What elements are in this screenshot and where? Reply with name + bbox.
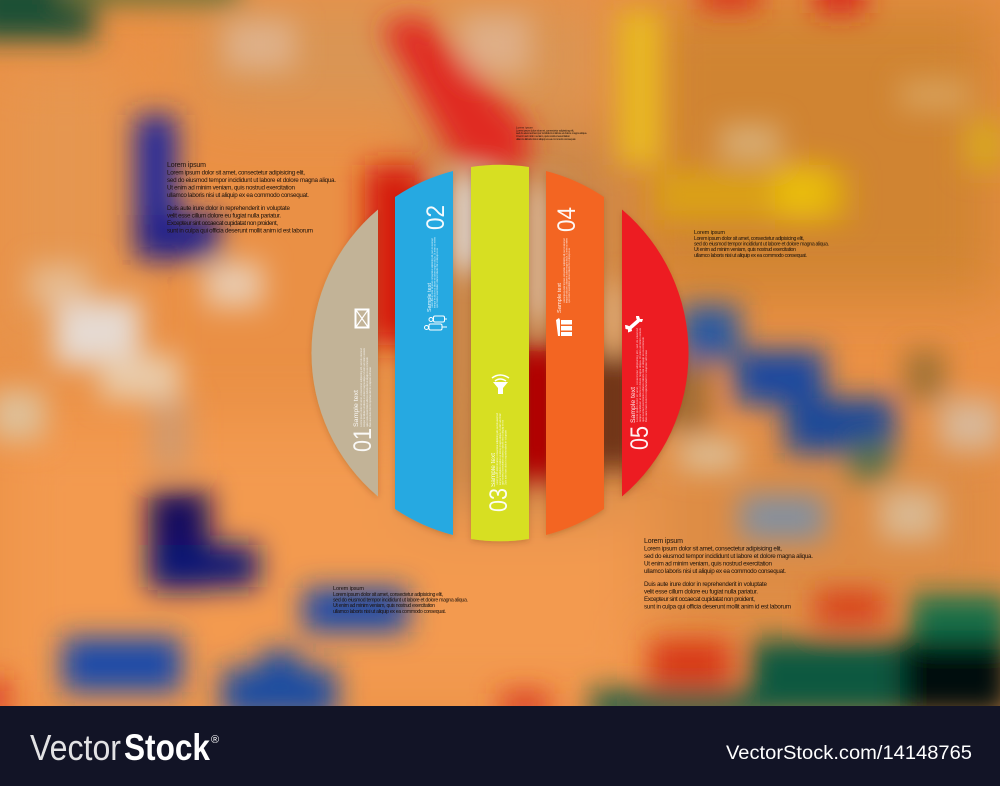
text block: bottom right: ullamco laboris nisi ut aliquip ex ea commodo consequat. <box>644 568 786 575</box>
strip 04 body text: Lorem ipsum dolor sit amet, consectetur adipisicing elit, sed do eiusmod <box>563 237 566 303</box>
text block: top centre small: Ut enim ad minim veniam, quis nostrud exercitation <box>516 134 570 138</box>
text block: bottom right: Lorem ipsum <box>644 538 683 545</box>
text block: top centre small: Lorem ipsum <box>516 126 534 130</box>
text block: top left: Ut enim ad minim veniam, quis nostrud exercitation <box>167 184 295 192</box>
strip 02 body text: quis nostrud exercitation ullamco laboris nisi ut aliquip ex ea <box>436 247 439 308</box>
text block: top centre small <box>516 126 587 141</box>
strip 01 body text <box>359 347 372 427</box>
text block: bottom right: sed do eiusmod tempor incididunt ut labore et dolore magna aliqua. <box>644 553 813 560</box>
strip 03 <box>471 165 529 541</box>
footer logo: Vector <box>30 727 121 768</box>
strip 01 sample text: Sample text <box>353 390 360 427</box>
icon: two people <box>424 316 447 330</box>
strip 05 body text <box>635 327 648 422</box>
text block: right: sed do eiusmod tempor incididunt ut labore et dolore magna aliqua. <box>694 242 829 248</box>
text block: top left: sed do eiusmod tempor incididunt ut labore et dolore magna aliqua. <box>167 177 336 184</box>
footer logo: Stock <box>124 727 210 768</box>
footer bar <box>0 706 1000 786</box>
strip 01 <box>311 210 378 496</box>
strip 04 body text: tempor incididunt ut labore et dolore magna aliqua. Ut enim ad minim <box>566 238 569 303</box>
strip 04 <box>546 171 604 535</box>
strip 05 body text: Lorem ipsum dolor sit amet, consectetur adipisicing elit, sed do eiusmod <box>635 327 639 422</box>
strip 05 body text: tempor incididunt ut labore et dolore magna aliqua. Ut enim ad minim veniam <box>638 328 642 422</box>
text block: bottom centre-left: ullamco laboris nisi ut aliquip ex ea commodo consequat. <box>333 609 446 615</box>
strip 02 body text <box>431 237 439 308</box>
strip 05 body text: quis nostrud exercitation ullamco laboris nisi ut aliquip ex ea commodo <box>641 336 645 422</box>
text block: bottom centre-left: Ut enim ad minim veniam, quis nostrud exercitation <box>333 603 435 609</box>
strip 05 shape <box>622 210 689 496</box>
text block: top centre small: sed do eiusmod tempor incididunt ut labore et dolore magna aliqua. <box>516 131 587 135</box>
strip 02 number: 02 <box>422 205 450 230</box>
text block: right: Lorem ipsum dolor sit amet, consectetur adipisicing elit, <box>694 236 804 242</box>
text block: top centre small: Lorem ipsum dolor sit amet, consectetur adipisicing elit, <box>516 128 574 132</box>
strip 05 body text: Duis aute irure dolor in reprehenderit in voluptate velit esse <box>644 349 648 422</box>
text block: bottom right: Ut enim ad minim veniam, quis nostrud exercitation <box>644 560 772 568</box>
strip 03 number: 03 <box>485 488 513 512</box>
text block: top left: velit esse cillum dolore eu fugiat nulla pariatur. <box>167 212 281 220</box>
icon: envelope <box>356 310 368 328</box>
text block: top left: sunt in culpa qui officia deserunt mollit anim id est laborum <box>167 228 313 234</box>
strip 03 body text <box>496 412 507 485</box>
text block: top centre small: ullamco laboris nisi ut aliquip ex ea commodo consequat. <box>516 137 576 141</box>
text block: top left: Lorem ipsum <box>167 162 206 169</box>
text block: right: ullamco laboris nisi ut aliquip ex ea commodo consequat. <box>694 253 807 259</box>
strip 03 body text: tempor incididunt ut labore et dolore magna aliqua. Ut enim ad minim <box>499 413 502 485</box>
strip 04 body text <box>563 237 571 303</box>
strip 02 body text: tempor incididunt ut labore et dolore magna aliqua. Ut enim ad minim <box>434 237 437 308</box>
text block: bottom right: velit esse cillum dolore eu fugiat nulla pariatur. <box>644 588 758 596</box>
strip 04 shape <box>546 171 604 535</box>
strip 03 shape <box>471 165 529 541</box>
text block: bottom right: Duis aute irure dolor in reprehenderit in voluptate <box>644 581 767 588</box>
strip 01 shape <box>311 210 378 496</box>
strip 02 body text: Lorem ipsum dolor sit amet, consectetur adipisicing elit, sed do eiusmod <box>431 237 434 308</box>
strip 03 sample text: Sample text <box>491 453 497 487</box>
strip 05 sample text: Sample text <box>630 387 637 423</box>
strip 03 body text: Duis aute irure dolor in reprehenderit in voluptate <box>504 429 507 485</box>
text block: right <box>694 230 829 259</box>
strip 01 body text: tempor incididunt ut labore et dolore magna aliqua. Ut enim ad minim veniam <box>362 348 366 427</box>
strip 02 <box>395 171 453 535</box>
strip 04 number: 04 <box>553 207 581 232</box>
strip 01 body text: Duis aute irure dolor in reprehenderit in voluptate velit esse <box>368 366 372 427</box>
text block: top left: Duis aute irure dolor in reprehenderit in voluptate <box>167 205 290 212</box>
icon: bar chart <box>556 318 572 336</box>
strip 04 sample text: Sample text <box>557 283 563 313</box>
strip 04 body text: quis nostrud exercitation ullamco laboris nisi ut aliquip ex ea <box>568 247 571 303</box>
strip 01 body text: Lorem ipsum dolor sit amet, consectetur adipisicing elit, sed do eiusmod <box>359 347 363 427</box>
icon: speaker with sound waves <box>492 375 509 394</box>
footer logo: ® <box>211 734 219 746</box>
text block: top left: Excepteur sint occaecat cupidatat non proident, <box>167 220 278 227</box>
text block: bottom right: Lorem ipsum dolor sit amet, consectetur adipisicing elit, <box>644 546 782 552</box>
strip 01 number: 01 <box>349 428 377 452</box>
strip 02 shape <box>395 171 453 535</box>
text block: top left <box>167 162 336 234</box>
strip 05 <box>622 210 689 496</box>
strip 03 body text: Lorem ipsum dolor sit amet, consectetur adipisicing elit, sed do eiusmod <box>496 412 499 485</box>
strip 01 body text: quis nostrud exercitation ullamco laboris nisi ut aliquip ex ea commodo <box>365 356 369 427</box>
strip 05 number: 05 <box>626 426 654 450</box>
circle of five vertical strips <box>311 165 689 541</box>
text block: bottom right: sunt in culpa qui officia deserunt mollit anim id est laborum <box>644 604 791 610</box>
strip 02 sample text: Sample text <box>427 283 433 312</box>
text block: bottom centre-left: Lorem ipsum dolor sit amet, consectetur adipisicing elit, <box>333 592 443 598</box>
text block: top left: Lorem ipsum dolor sit amet, consectetur adipisicing elit, <box>167 170 305 176</box>
text block: right: Lorem ipsum <box>694 230 725 236</box>
footer image id: VectorStock.com/14148765 <box>726 742 972 764</box>
footer logo <box>30 727 219 768</box>
text block: top left: ullamco laboris nisi ut aliquip ex ea commodo consequat. <box>167 192 309 199</box>
text block: bottom right: Excepteur sint occaecat cupidatat non proident, <box>644 596 755 603</box>
text block: bottom right <box>644 538 813 610</box>
text block: bottom centre-left: Lorem ipsum <box>333 586 364 592</box>
strip 03 body text: quis nostrud exercitation ullamco laboris nisi ut aliquip ex ea <box>502 419 505 485</box>
text block: bottom centre-left: sed do eiusmod tempor incididunt ut labore et dolore magna aliqua. <box>333 598 468 604</box>
text block: right: Ut enim ad minim veniam, quis nostrud exercitation <box>694 247 796 253</box>
icon: wrench <box>625 316 643 332</box>
text block: bottom centre-left <box>333 586 468 615</box>
